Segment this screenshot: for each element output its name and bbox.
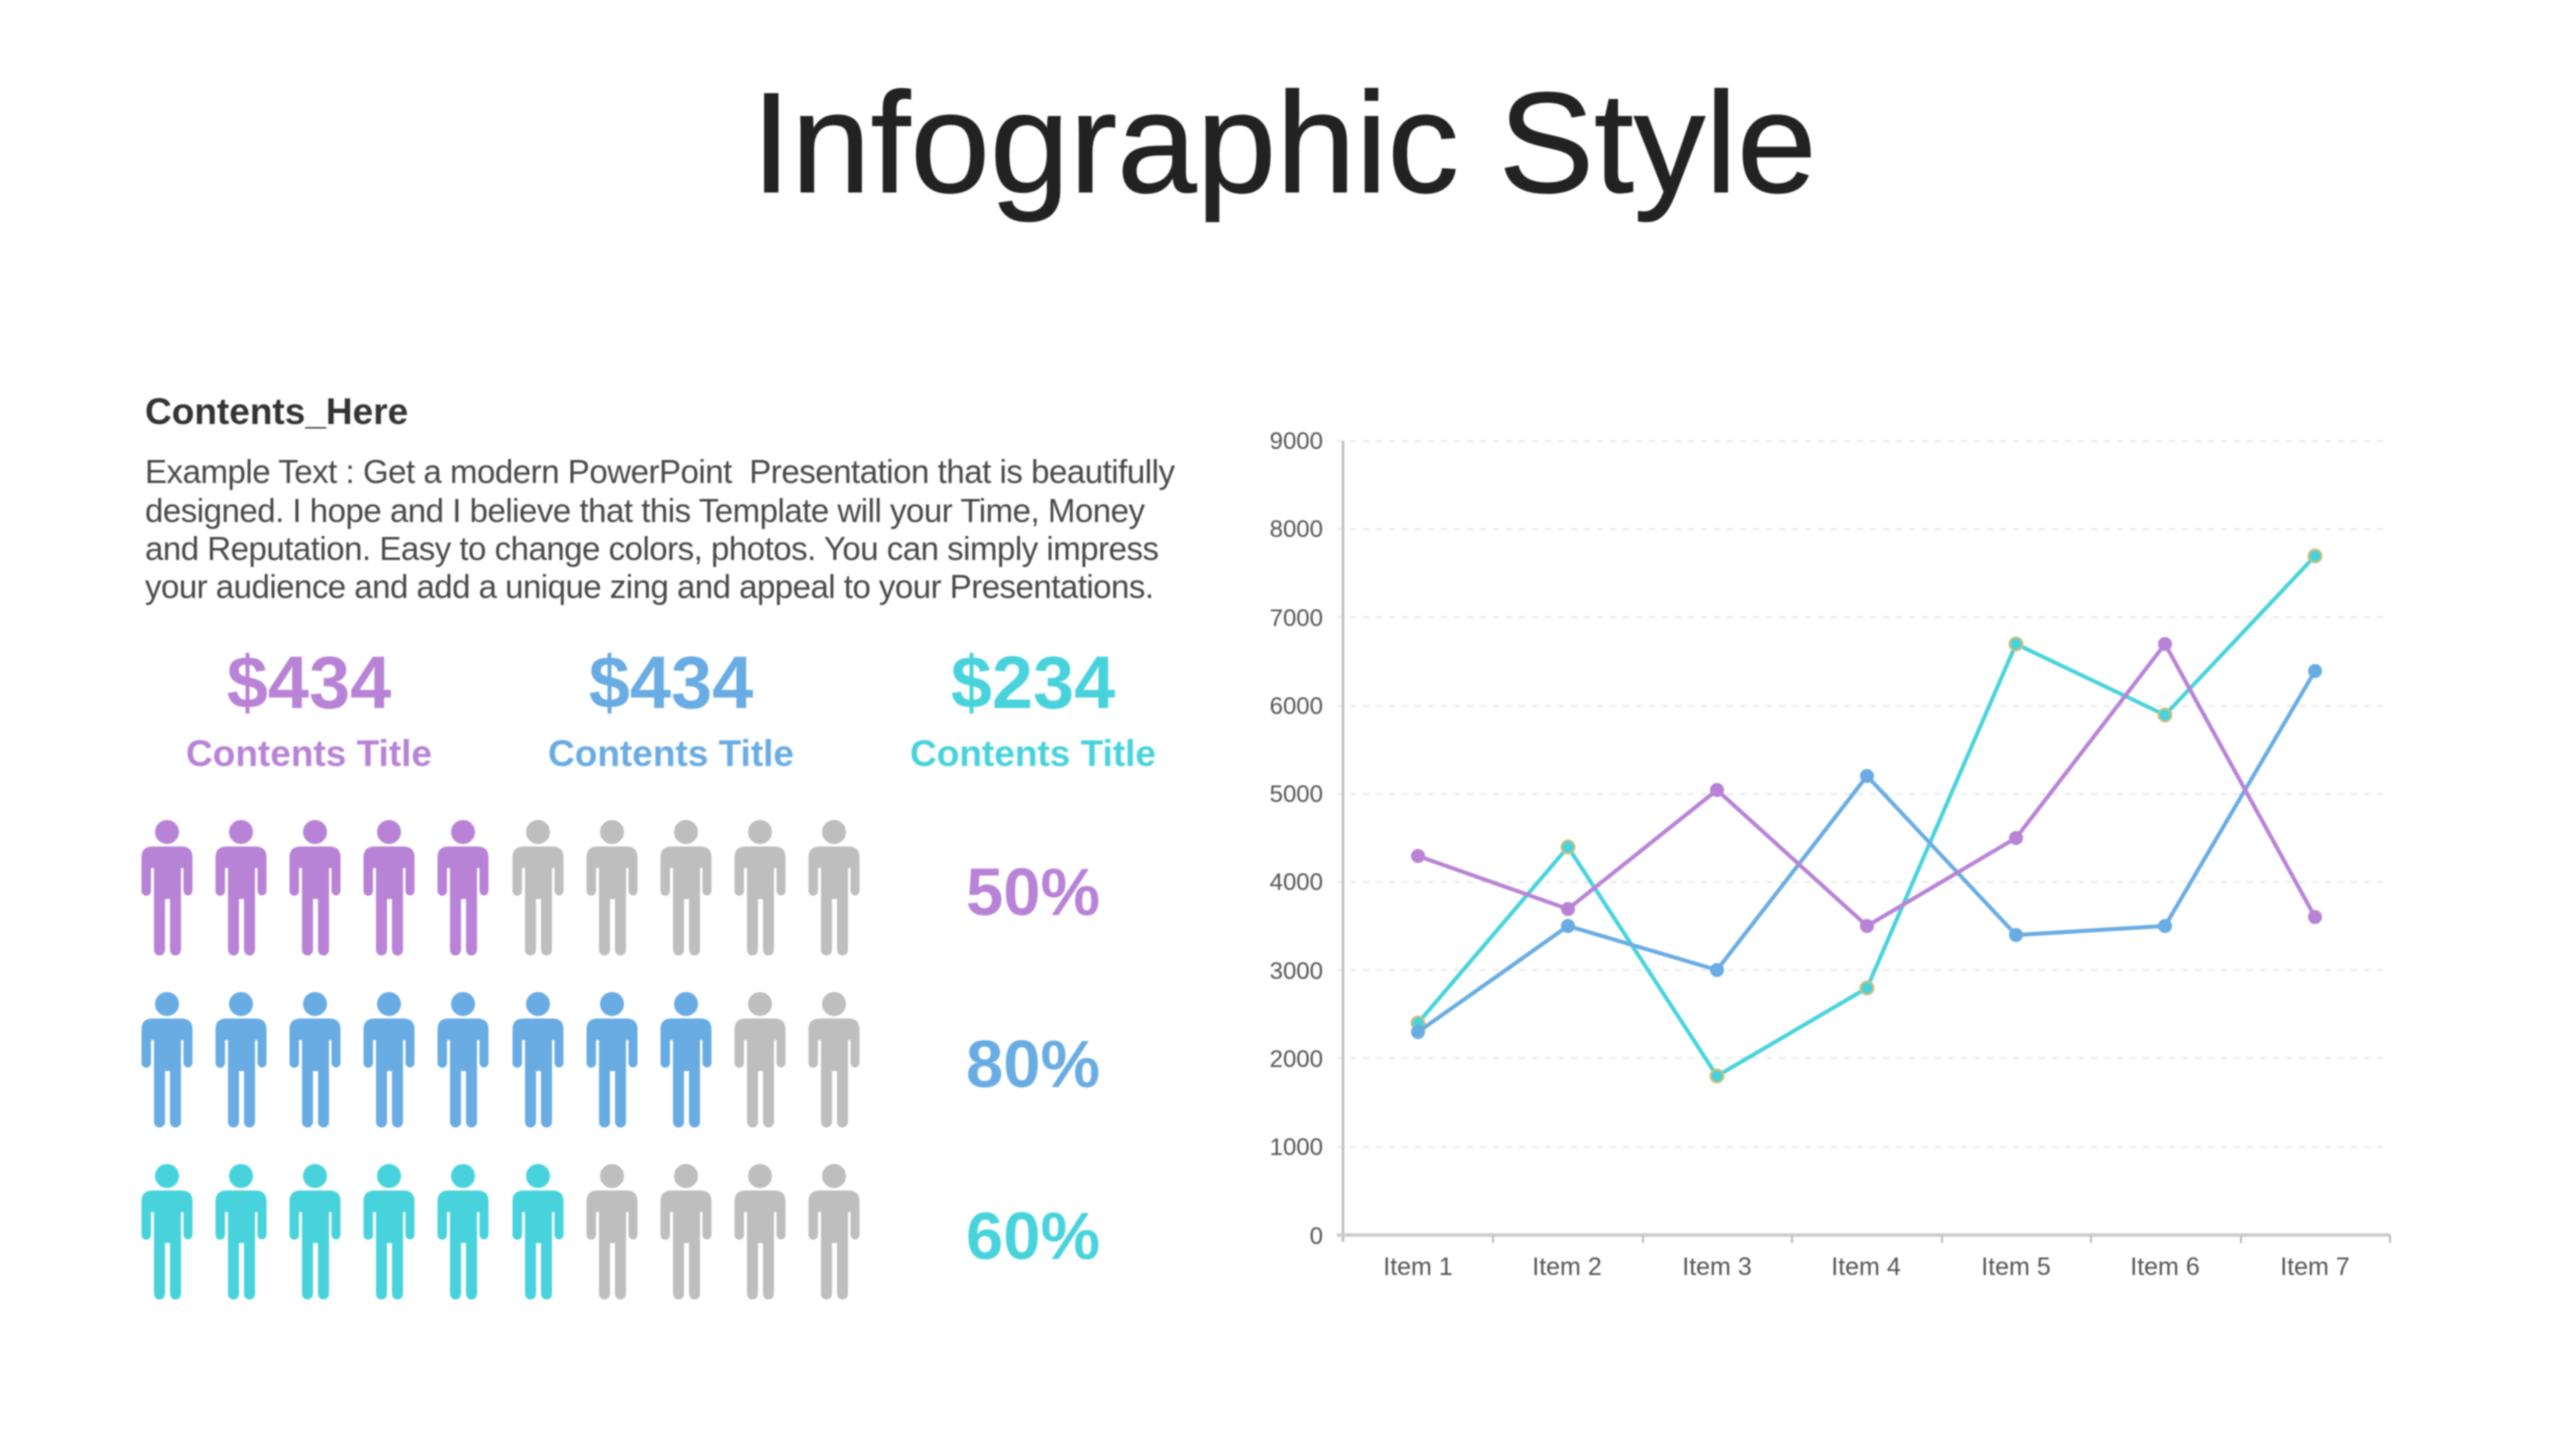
stat: teal $234: $234 [951,641,1115,724]
stat: blue $434 [548,641,794,774]
x axis: Item 1 [1383,1253,1453,1281]
y axis [1270,428,1343,1250]
percent label: 60%: 60% [966,1199,1100,1274]
percent label: 80%: 80% [966,1027,1100,1102]
y axis: 2000 [1270,1046,1323,1073]
y axis: 6000 [1270,693,1323,720]
y axis: 5000 [1270,781,1323,808]
pictogram row: 80% blue [142,992,860,1128]
body text block: designed. I hope and I believe that this Template will your Time, Money [145,492,1146,529]
heading: contents here: Contents_Here [145,391,408,432]
line chart [1270,428,2390,1281]
body text block: your audience and add a unique zing and appeal to your Presentations. [145,568,1154,605]
y axis: 9000 [1270,428,1323,455]
series: blue line [1411,664,2322,1039]
pictogram row: 50% purple [142,820,860,956]
series: teal line [1412,550,2322,1082]
stat: purple $434: Contents Title [186,733,432,774]
y axis: 1000 [1270,1134,1323,1161]
y axis: 3000 [1270,958,1323,985]
x axis: Item 7 [2280,1253,2350,1281]
stat: purple $434: $434 [227,641,391,724]
x axis: Item 5 [1981,1253,2051,1281]
body text block: Example Text : Get a modern PowerPoint Presentation that is beautifully [145,453,1176,490]
x axis: Item 2 [1532,1253,1602,1281]
x axis: Item 3 [1682,1253,1752,1281]
pictogram row: 60% teal [142,1164,860,1300]
x axis: Item 6 [2130,1253,2200,1281]
x axis [1337,1235,2390,1281]
y axis: 0 [1310,1223,1323,1250]
y axis: 4000 [1270,869,1323,896]
x axis: Item 4 [1831,1253,1901,1281]
stat: teal $234 [910,641,1156,774]
stat: blue $434: Contents Title [548,733,794,774]
series: purple line [1411,637,2322,933]
stat: purple $434 [186,641,432,774]
percent label: 50%: 50% [966,855,1100,930]
body text block [145,453,1176,605]
y axis: 8000 [1270,516,1323,543]
stat: teal $234: Contents Title [910,733,1156,774]
body text block: and Reputation. Easy to change colors, photos. You can simply impress [145,530,1159,567]
stat: blue $434: $434 [589,641,753,724]
y axis: 7000 [1270,605,1323,632]
title: Infographic Style [751,64,1817,223]
